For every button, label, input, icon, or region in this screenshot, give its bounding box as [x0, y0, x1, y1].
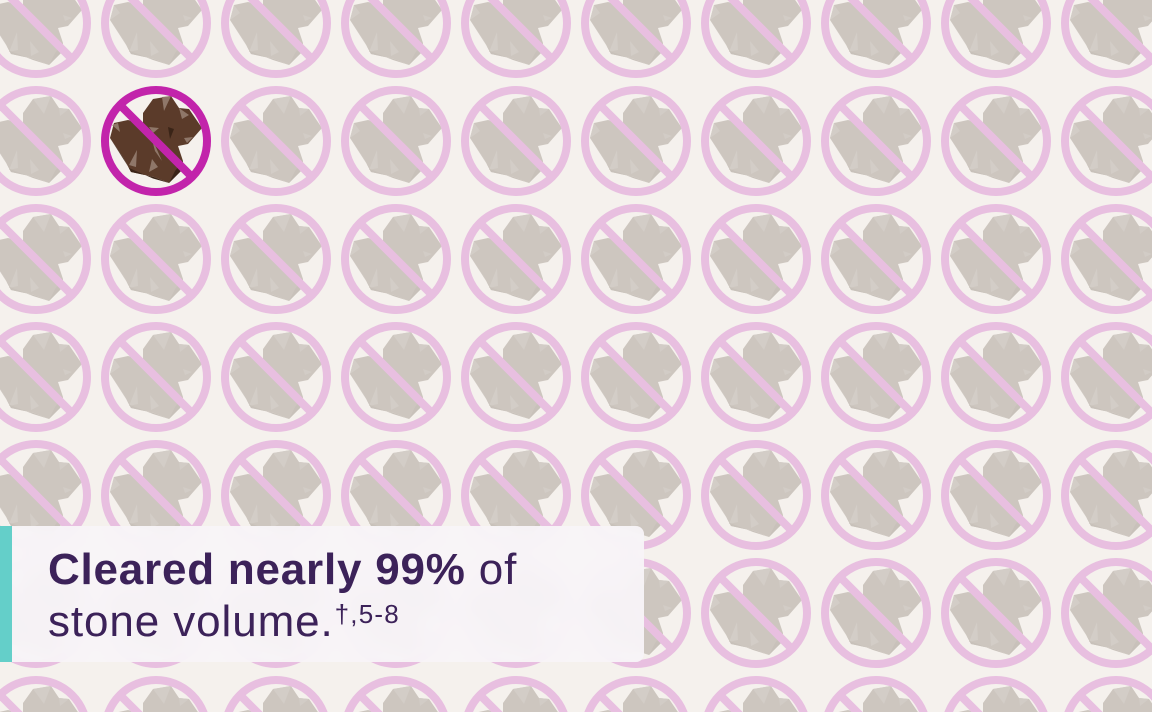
callout card	[0, 526, 644, 662]
callout text: stone volume.†,5-8	[48, 597, 400, 646]
card panel	[12, 526, 644, 662]
callout text	[48, 545, 517, 646]
icon: highlighted remaining stone	[101, 86, 211, 196]
teal accent bar	[0, 526, 12, 662]
callout text: Cleared nearly 99% of	[48, 545, 517, 594]
